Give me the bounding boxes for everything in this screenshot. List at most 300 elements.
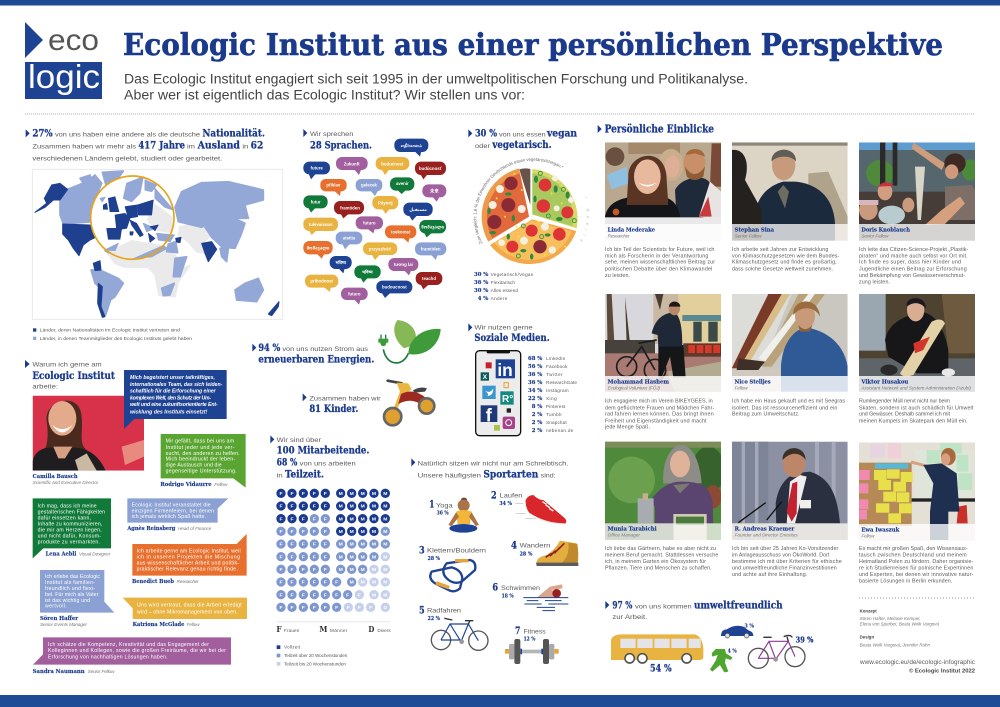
icon: car 3 % <box>721 623 755 638</box>
heading: Persönliche Einblicke: Persönliche Einblicke <box>605 123 714 136</box>
social media list: ResearchGate <box>546 380 577 385</box>
sport: running: 34 % <box>499 501 512 507</box>
profile: Nico Stelljes <box>732 294 848 418</box>
profile: Munia Tarabichi: Pflanzen, Tiere und Menschen zu schaffen. <box>605 566 712 572</box>
quote: Sören Haffer: Institut als familien- <box>45 580 95 586</box>
quote: Benedict Bueb: praktischer Relevanz genau richtig finde. <box>137 566 238 572</box>
profile: Viktor Husakou: Assistant Network and System Administration (Azubi) <box>860 385 971 390</box>
caption: Camilla Bausch: Scientific and Executive Director <box>33 480 99 485</box>
quote: Lena Aebli: gestalterischen Fähigkeiten <box>38 509 105 515</box>
sport: swimming <box>492 581 568 611</box>
heading: nationality: 62 <box>251 141 263 152</box>
profile: Mohammad Hashem: rad fahren lernen können. Das bringt ihnen <box>605 412 714 418</box>
speech bubbles <box>303 139 446 305</box>
sport: fitness: 7 <box>515 624 520 637</box>
speech bubbles: toekomst <box>391 229 411 234</box>
profile: Munia Tarabichi: ich, in meinem Garten ein Ökosystem für <box>605 558 706 565</box>
social media list: 2 % <box>532 420 542 426</box>
heading: social media <box>468 323 550 344</box>
panel: employees <box>270 435 391 666</box>
sport: climbing: 28 % <box>428 556 440 562</box>
speech bubbles: future <box>311 166 323 171</box>
profile: Munia Tarabichi <box>605 442 725 572</box>
sport: cycling <box>419 603 488 650</box>
profile: R. Andreas Kraemer: bestimme ich mit über Kriterien für ethische <box>732 559 842 565</box>
pictogram chart: staff dots: FFFFFMMMMM <box>279 542 387 548</box>
quote: Camilla Bausch: welt und eine zukunftsorientierte Ent- <box>130 402 218 408</box>
intro text: Aber wer ist eigentlich das Ecologic Institut? Wir stellen uns vor: <box>124 88 525 104</box>
quote: Sandra Naumann: Kolleginnen und Kollegen, sowie die großen Freiräume, die wir bei der <box>48 648 226 654</box>
social media list: Twitter <box>546 372 563 377</box>
quote: Katriona McGlade: Uns wird vertraut, dass die Arbeit erledigt <box>137 603 242 609</box>
profile: Ewa Iwaszuk: Ewa Iwaszuk <box>861 527 900 533</box>
sport: cycling: Radfahren <box>427 608 461 615</box>
speech bubbles: tương lai <box>394 262 413 267</box>
pictogram chart: staff dots <box>276 489 390 612</box>
highlight circle Europe <box>91 176 174 259</box>
speech bubbles: futur <box>311 199 321 204</box>
quote: Rodrigo Vidaurre: Mir gefällt, dass bei uns am <box>166 439 234 445</box>
social media list: LinkedIn <box>546 356 566 361</box>
pizza legend: 30 % <box>474 288 488 294</box>
icon: bus 54 %: 54 % <box>650 664 672 675</box>
logo: eco <box>48 24 99 57</box>
heading: vegan or vegetarian: 30 % <box>475 129 497 140</box>
heading: nationality: 417 Jahre <box>138 141 185 152</box>
pizza chart <box>473 158 590 264</box>
quote: Sören Haffer: ist das wichtig und <box>45 598 90 604</box>
speech bubbles: Zukunft <box>344 161 360 166</box>
photo: Camilla Bausch <box>33 396 144 471</box>
profile: Doris Knoblauch: piraten“ und mache auch selbst vor Ort mit. <box>859 253 968 259</box>
heading: renewable energy <box>252 343 374 366</box>
social media list: 34 % <box>528 388 542 394</box>
profile: Doris Knoblauch: zung leisten. <box>859 279 890 285</box>
profile: Ewa Iwaszuk: und Experten, bei denen wir innovative natur- <box>859 572 974 578</box>
pizza chart: * Quelle <box>580 196 590 242</box>
world map <box>32 169 283 319</box>
profile: Doris Knoblauch <box>859 142 978 285</box>
social media list: 36 % <box>528 380 542 386</box>
profile: R. Andreas Kraemer <box>732 442 848 578</box>
quote: Camilla Bausch: Mich begeistert unser tatkräftiges, <box>130 375 215 381</box>
quote: Agnès Reinsberg: einzigen Firmenfeiern, bei denen <box>132 508 214 514</box>
social media list <box>528 356 577 434</box>
profile: Stephan Sina: Senior Fellow <box>735 233 762 238</box>
profile: Ewa Iwaszuk: Es macht mir großen Spaß, den Wissensaus- <box>859 546 968 552</box>
icon: bicycle 39 %: 39 % <box>796 635 814 645</box>
heading: nationality: Zusammen haben wir mehr als <box>32 144 137 151</box>
heading: 28 Sprachen: Wir sprechen <box>310 131 354 138</box>
profile: Doris Knoblauch: und Bekämpfung von Gewässerverschmut- <box>859 273 965 279</box>
heading: nationality: Nationalität. <box>202 129 265 140</box>
heading: employees: 100 Mitarbeitende. <box>277 445 369 456</box>
profile: Stephan Sina <box>732 142 848 272</box>
icon: phone with apps: in <box>497 360 513 380</box>
quote: Camilla Bausch: schaftlich für die Erforschung einer <box>130 389 217 395</box>
speech bubbles: avenir <box>396 181 409 186</box>
credits: Sören Hafter, Melanie Kemper, <box>860 616 921 621</box>
quote: Camilla Bausch: internationales Team, das sich leiden- <box>130 382 223 388</box>
panel: renewable energy and children <box>252 320 441 425</box>
heading: vegan or vegetarian: von uns essen <box>499 132 546 139</box>
heading: children: 81 Kinder. <box>309 404 358 415</box>
speech bubbles: budoucnost <box>382 285 407 290</box>
profile: Mohammad Hashem: jede Menge Spaß. <box>604 425 650 431</box>
panel: social media <box>468 323 577 436</box>
profile: Ewa Iwaszuk: basierte Lösungen in Berlin erkunden. <box>859 579 952 585</box>
quote: Sandra Naumann: Sandra Naumann <box>33 669 85 675</box>
social media list: Pinterest <box>546 404 566 409</box>
sport: hiking <box>511 538 578 566</box>
speech bubbles: भविष्य <box>362 269 373 274</box>
speech bubbles: framtiden <box>421 246 441 251</box>
profile: Linda Mederake: politischen Debatte über den Klimawandel <box>605 266 712 272</box>
profile: Mohammad Hashem: Ecological Volunteer (FÖJ) <box>608 384 660 390</box>
panel: commuting <box>605 600 814 675</box>
pizza chart: Zum Vergleich: 1,6 % der Einwohner Deutschlands essen vegetarisch/vegan.* <box>473 158 564 244</box>
quote: Lena Aebli: dafür einsetzen kann, <box>38 515 91 521</box>
logo: logic <box>28 58 100 95</box>
heading: nationality: Ausland <box>197 141 240 152</box>
sport: yoga <box>429 497 479 533</box>
quote: Katriona McGlade: Fellow <box>187 622 200 627</box>
quote: Benedict Bueb: ich in unseren Projekten die Mischung <box>137 554 240 560</box>
sport: cycling: 22 % <box>428 616 440 622</box>
quote: Agnès Reinsberg: Agnès Reinsberg <box>126 525 176 532</box>
heading: vegan or vegetarian: vegetarisch. <box>491 140 552 151</box>
quote: Sören Haffer: Ich erlebe das Ecologic <box>45 574 100 580</box>
sport: yoga: Yoga <box>436 502 453 509</box>
quote: Benedict Bueb: Ich arbeite gerne am Ecologic Institut, weil <box>137 548 241 554</box>
social media list: 2 % <box>532 428 542 434</box>
profile: Linda Mederake <box>605 142 721 279</box>
credits: © Ecologic Institut 2022 <box>909 667 975 674</box>
speech bubbles: tulevaisuus <box>309 222 333 227</box>
heading: vegan or vegetarian <box>468 129 578 151</box>
social media list: Tumblr <box>546 412 562 417</box>
heading: commuting: 97 % <box>612 600 633 611</box>
heading: renewable energy: erneuerbaren Energien. <box>258 355 374 366</box>
quote: Lena Aebli: Visual Designer <box>79 552 111 557</box>
icon: pedestrian 4 % <box>710 649 737 672</box>
heading: nationality: verschiedenen Ländern gelebt, studiert oder gearbeitet. <box>32 156 223 163</box>
quote: Rodrigo Vidaurre: dige Austausch und die <box>166 463 222 469</box>
icon: phone with apps: f <box>486 404 493 425</box>
heading: children <box>303 393 382 415</box>
speech bubbles: مستقبل <box>409 207 427 212</box>
profile: Viktor Husakou: und Gewässer. Deshalb sammel ich mit <box>859 412 951 418</box>
social media list: 8 % <box>532 404 542 410</box>
legend: gender: F <box>276 624 282 634</box>
profile: Nico Stelljes: Ich habe ein Haus gekauft und es mit Seegras <box>732 399 845 405</box>
speech bubbles: Pāyorij <box>378 200 393 205</box>
sport: yoga: 1 <box>429 497 434 510</box>
profile: Ewa Iwaszuk: Heimatland Polen zu fördern. Daher organisie- <box>859 559 974 565</box>
legend: working time: Teilzeit über 20 Wochenstunden <box>284 653 348 658</box>
heading: renewable energy: 94 % <box>258 343 281 354</box>
speech bubbles: futuro <box>363 221 376 226</box>
heading: nationality: von uns haben eine andere als die deutsche <box>55 132 200 139</box>
pizza legend: Andere <box>491 296 508 301</box>
intro text: Das Ecologic Institut engagiert sich seit 1995 in der umweltpolitischen Forschung und Politikanalyse. <box>124 72 748 88</box>
profile: Munia Tarabichi: Ich liebe das Gärtnern, habe es aber nicht zu <box>605 546 716 552</box>
icon: phone with apps: R° <box>502 394 513 405</box>
legend: gender: M <box>319 624 327 634</box>
sport: hiking: Wandern <box>520 543 551 550</box>
heading: employees: 68 % <box>277 457 298 468</box>
legend: gender <box>276 624 391 634</box>
speech bubbles: भविष्य <box>335 260 346 265</box>
quote: Katriona McGlade: Katriona McGlade <box>133 622 185 628</box>
quote: Sören Haffer: freundlich und flexi- <box>45 586 95 592</box>
map legend: Länder, in denen Teammitglieder des Ecologic Instituts gelebt haben <box>40 336 192 342</box>
heading: children: Zusammen haben wir <box>309 395 382 402</box>
heading: nationality: 27% <box>32 129 53 140</box>
profile: R. Andreas Kraemer: R. Andreas Kraemer <box>735 527 795 533</box>
profile: Viktor Husakou: Rumliegender Müll nervt nicht nur beim <box>859 399 951 405</box>
caption: Camilla Bausch <box>33 474 99 485</box>
panel: food <box>468 128 590 302</box>
profile: Nico Stelljes: Nico Stelljes <box>735 379 771 385</box>
heading: employees: in <box>277 473 283 480</box>
quote: Lena Aebli: produkte zu vermarkten. <box>38 539 100 545</box>
heading: commuting: von uns kommen <box>635 603 692 610</box>
quote: Katriona McGlade: wird – ohne Mikromanagement von oben. <box>137 609 238 615</box>
credits: Beata Welk Vargová, Jennifer Rahn <box>860 643 930 648</box>
heading: social media: Soziale Medien. <box>474 333 550 344</box>
icon: phone with apps: X <box>483 374 488 381</box>
icon: balance bike <box>384 381 434 425</box>
profile: Doris Knoblauch: Jugendliche einen Beitrag zur Erforschung <box>859 266 967 272</box>
legend: working time <box>277 645 348 666</box>
speech bubbles: 未来 <box>430 188 439 195</box>
sport: running <box>491 488 566 524</box>
profile: Stephan Sina: dass solche Gesetze weltweit zunehmen. <box>732 266 833 272</box>
pizza legend: Vegetarisch/Vegan <box>491 272 534 277</box>
speech bubbles: futuro <box>348 291 361 296</box>
heading: employees: von uns arbeiten <box>300 460 356 467</box>
social media list: Instagram <box>546 388 569 393</box>
profile: Ewa Iwaszuk: re ich Studienreisen für polnische Expertinnen <box>859 566 973 572</box>
profile: R. Andreas Kraemer: im Anlageausschuss von ÖkoWorld. Dort <box>732 551 830 558</box>
quote: Benedict Bueb: aus wissenschaftlicher Arbeit und politik- <box>137 560 239 566</box>
profile: Viktor Husakou: Viktor Husakou <box>860 379 908 385</box>
quote: Camilla Bausch: wicklung des Instituts einsetzt! <box>130 409 208 415</box>
map legend: Länder, deren Nationalitäten im Ecologic Institut vertreten sind <box>40 328 180 334</box>
pictogram chart: staff dots: FFFFFFFFFD <box>279 605 388 611</box>
profile: Mohammad Hashem: Freiheit und Eigenständigkeit und macht <box>605 418 707 424</box>
quote: Benedict Bueb <box>132 534 247 585</box>
sport: fitness: 12 % <box>524 637 535 643</box>
quote: Benedict Bueb: Benedict Bueb <box>132 579 174 585</box>
heading: Warum ich gerne am Ecologic Institut arbeite <box>25 360 115 390</box>
social media list: Facebook <box>546 364 568 369</box>
heading: Warum ich gerne am Ecologic Institut arbeite: Ecologic Institut <box>32 371 115 382</box>
credits: Konzept <box>860 609 877 614</box>
profile: Mohammad Hashem: dem geflüchtete Frauen und Mädchen Fahr- <box>605 405 715 411</box>
icon: leaves and plug <box>378 320 441 363</box>
profile: R. Andreas Kraemer: Ich bin seit über 25 Jahren Ko-Vorsitzender <box>732 546 839 552</box>
pizza legend: Alles essend <box>491 288 518 293</box>
quote: Agnès Reinsberg <box>126 498 228 532</box>
icon: bus 54 % <box>611 634 703 675</box>
profile: Doris Knoblauch: Doris Knoblauch <box>861 228 910 234</box>
profile: Mohammad Hashem <box>604 294 721 431</box>
quote: Camilla Bausch: komplexen Welt, den Schutz der Um- <box>130 395 211 401</box>
sport: swimming: 6 <box>492 581 498 594</box>
pictogram chart: staff dots: FFFFFFMMMM <box>279 580 387 586</box>
sport: cycling: 5 <box>419 603 425 616</box>
icon: bicycle 39 % <box>748 635 814 668</box>
heading: nationality: in <box>242 144 249 151</box>
intro text <box>124 72 748 104</box>
legend: gender: D <box>368 624 374 634</box>
pizza legend: 36 % <box>474 280 488 286</box>
profile: Ewa Iwaszuk <box>859 442 975 585</box>
heading: 28 Sprachen <box>303 129 372 152</box>
quote: Sandra Naumann: Erforschung von nachhaltigen Lösungen haben. <box>48 655 168 661</box>
speech bubbles: budúcnosť <box>419 166 443 171</box>
heading: sports: Sportarten <box>483 469 539 480</box>
profile: Doris Knoblauch: Ich finde es super, dass hier Kinder und <box>859 260 961 266</box>
heading: commuting <box>605 600 783 621</box>
profile: Linda Mederake: Researcher <box>608 233 630 238</box>
map legend <box>33 328 192 342</box>
quote: Rodrigo Vidaurre: Fellow <box>214 482 228 487</box>
quote: Agnès Reinsberg: ich jemals wirklich Spaß hatte. <box>132 514 206 520</box>
profile: Viktor Husakou: Skaten, sondern ist auch schädlich für Umwelt <box>859 405 974 411</box>
pictogram chart: staff dots: FFFFFMMMMM <box>279 504 387 510</box>
profile: Linda Mederake: mich als Forscherin in der Verantwortung <box>605 253 708 259</box>
quote: Lena Aebli <box>33 498 111 558</box>
quote: Sandra Naumann: Senior Fellow <box>88 669 115 674</box>
quote: Sören Haffer: bel. Für mich als Vater <box>45 592 99 598</box>
heading: commuting: zur Arbeit. <box>612 614 648 621</box>
sport: fitness <box>505 624 559 664</box>
heading: nationality <box>26 129 265 163</box>
profile: Linda Mederake: Linda Mederake <box>608 228 655 234</box>
quote: Sandra Naumann: Ich schätze die Kompetenz, Kreativität und das Engagement der <box>48 642 209 648</box>
social media list: Xing <box>546 396 557 401</box>
pictogram chart: staff dots: FFFFFFFFMM <box>279 592 387 598</box>
profile: Stephan Sina: Klimaschutzgesetz und finde es großartig, <box>732 260 837 266</box>
quote: Lena Aebli: Inhalte zu kommunizieren, <box>38 521 102 527</box>
quote: Rodrigo Vidaurre: gegenseitige Unterstützung. <box>166 468 237 474</box>
quote: Agnès Reinsberg: Head of Finance <box>178 526 212 531</box>
profile: Viktor Husakou <box>859 294 975 424</box>
sport: yoga: 36 % <box>437 510 449 516</box>
social media list: 56 % <box>528 364 542 370</box>
profile: Nico Stelljes: isoliert. Das ist ressourceneffizient und ein <box>732 405 837 411</box>
quote: Sören Haffer: Senior Events Manager <box>40 622 87 627</box>
social media list: nebenan.de <box>546 428 574 433</box>
logo <box>25 22 102 99</box>
profile: Stephan Sina: Stephan Sina <box>735 228 774 234</box>
caption: Camilla Bausch: Camilla Bausch <box>33 474 78 480</box>
heading: sports: Natürlich sitzen wir nicht nur am Schreibtisch. <box>418 461 568 468</box>
quote: Sören Haffer: wertvoll. <box>45 604 67 610</box>
pictogram chart: staff dots: FFFFFMMMMM <box>279 567 387 573</box>
profile: Viktor Husakou: meinen Kumpels im Skatepark den Müll ein. <box>859 418 968 424</box>
profile: Doris Knoblauch: Ich leite das Citizen-Science-Projekt „Plastik- <box>859 247 969 253</box>
credits: Design <box>860 634 874 639</box>
quote: Lena Aebli: und nicht dafür, Konsum- <box>38 533 101 539</box>
speech bubbles: მომავალი <box>307 245 330 250</box>
profile: Munia Tarabichi: Munia Tarabichi <box>608 527 657 533</box>
profile: Ewa Iwaszuk: Fellow <box>861 533 875 538</box>
social media list: 22 % <box>528 396 542 402</box>
panel: quotes <box>25 360 247 675</box>
icon: car 3 %: 3 % <box>744 623 755 629</box>
quote: Agnès Reinsberg: Ecologic Institut veranstaltet die <box>132 503 211 509</box>
heading: nationality: im <box>187 144 196 151</box>
heading: employees: Wir sind über <box>277 437 322 444</box>
social media list: 36 % <box>528 372 542 378</box>
speech bubbles: gelecek <box>361 183 378 188</box>
panel: languages <box>303 129 446 305</box>
legend: gender: Divers <box>377 628 391 633</box>
sport: running: 2 <box>491 488 497 501</box>
quote: Lena Aebli: die mir am Herzen liegen, <box>38 527 102 533</box>
heading: vegan or vegetarian: vegan <box>546 129 578 140</box>
title: Ecologic Institut aus einer persönlichen Perspektive <box>123 28 943 63</box>
profile: Munia Tarabichi: Office Manager <box>608 533 640 538</box>
speech bubbles: budućnost <box>381 161 404 166</box>
speech bubbles: przyszłość <box>369 246 392 251</box>
sport: climbing: Klettern/Bouldern <box>427 548 486 555</box>
profile: R. Andreas Kraemer: Founder and Director Emeritus <box>735 533 798 538</box>
heading: 28 Sprachen: 28 Sprachen. <box>310 141 372 152</box>
heading: sports: Unsere häufigsten <box>418 472 481 479</box>
legend: gender: Frauen <box>284 628 300 633</box>
quote: Katriona McGlade <box>123 598 247 628</box>
credits: www.ecologic.eu/de/ecologic-infographic <box>859 660 975 666</box>
sport: fitness: Fitness <box>524 628 546 635</box>
heading: sports <box>411 458 568 480</box>
legend: working time: Vollzeit <box>284 645 301 650</box>
profile: Ewa Iwaszuk: tausch zwischen Deutschland und meinem <box>859 552 967 558</box>
profile: R. Andreas Kraemer: und umweltfreundliche Finanzinvestitionen <box>732 566 837 572</box>
heading: sports: sind: <box>541 472 556 479</box>
sport: climbing: 3 <box>419 543 425 556</box>
sport: swimming: Schwimmen <box>501 585 540 592</box>
quote: Camilla Bausch <box>124 370 227 429</box>
sport: swimming: 18 % <box>502 594 514 600</box>
heading: employees: Teilzeit. <box>285 470 324 481</box>
speech bubbles: ateitis <box>343 236 356 241</box>
sport: climbing <box>419 543 486 591</box>
quote: Lena Aebli: Lena Aebli <box>46 552 76 558</box>
panel: nationalities and world map <box>26 129 283 342</box>
heading: vegan or vegetarian: oder <box>475 143 491 150</box>
profile: Stephan Sina: von Klimaschutzgesetzen wie dem Bundes- <box>732 253 840 259</box>
quote: Sören Haffer: Sören Haffer <box>40 615 78 622</box>
quote: Rodrigo Vidaurre <box>160 434 246 488</box>
speech bubbles: prihodnost <box>310 279 334 284</box>
social media list: Snapchat <box>546 420 567 425</box>
quote: Rodrigo Vidaurre: Institut jeder und jede ver- <box>166 445 235 451</box>
credits: Elena von Sperber, Beata Welk Vargová <box>860 622 939 627</box>
quote: Benedict Bueb: Researcher <box>177 579 199 584</box>
profile: Mohammad Hashem: Ich engagiere mich im Verein BIKEYGEES, in <box>605 399 713 405</box>
pizza legend: Flexitarisch <box>491 280 515 285</box>
sport: running: Laufen <box>500 493 523 500</box>
quote: Rodrigo Vidaurre: Mich beeindruckt der leben- <box>166 457 235 463</box>
legend: gender: Männer <box>330 628 348 633</box>
profile: Nico Stelljes: Fellow <box>735 385 748 390</box>
profile: Stephan Sina: Ich arbeite seit Jahren zur Entwicklung <box>732 247 828 253</box>
